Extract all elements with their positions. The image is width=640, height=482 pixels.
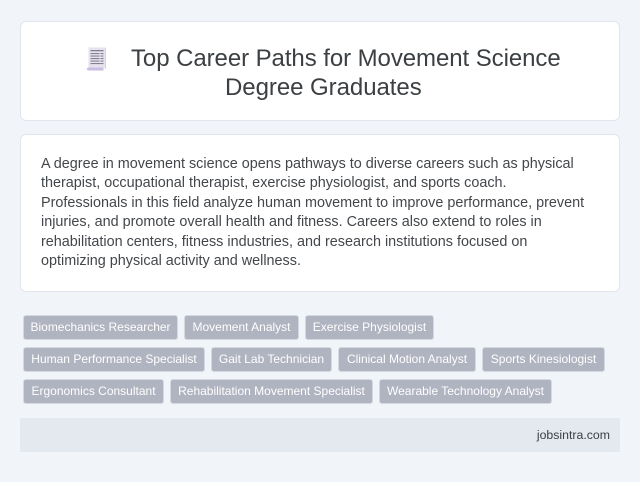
description text xyxy=(41,156,584,269)
tag: Movement Analyst xyxy=(192,320,291,334)
description panel xyxy=(20,134,620,292)
tag xyxy=(23,347,205,372)
footer text: jobsintra.com xyxy=(537,428,610,442)
tag xyxy=(379,379,552,404)
tag xyxy=(338,347,476,372)
description text: Professionals in this field analyze human movement to improve performance, prevent xyxy=(41,195,584,211)
description text: rehabilitation centers, fitness industries, and research institutions focused on xyxy=(41,234,527,250)
icon: document scroll xyxy=(86,48,106,70)
tag: Exercise Physiologist xyxy=(313,320,426,334)
tag xyxy=(211,347,332,372)
description text: injuries, and promote overall health and fitness. Careers also extend to roles in xyxy=(41,214,542,230)
tag: Wearable Technology Analyst xyxy=(387,384,544,398)
title text xyxy=(131,45,561,101)
tag: Gait Lab Technician xyxy=(219,352,324,366)
tag xyxy=(305,315,434,340)
tag xyxy=(23,315,178,340)
description text: optimizing physical activity and wellness. xyxy=(41,253,301,269)
tag: Ergonomics Consultant xyxy=(31,384,156,398)
tag: Human Performance Specialist xyxy=(31,352,197,366)
title panel: Degree Graduates xyxy=(225,74,422,101)
tag: Biomechanics Researcher xyxy=(30,320,171,334)
tags xyxy=(23,315,605,404)
tag xyxy=(184,315,299,340)
tag: Sports Kinesiologist xyxy=(491,352,596,366)
tag: Rehabilitation Movement Specialist xyxy=(178,384,365,398)
description text: therapist, occupational therapist, exercise physiologist, and sports coach. xyxy=(41,175,507,191)
description text: A degree in movement science opens pathways to diverse careers such as physical xyxy=(41,156,574,172)
footer bar xyxy=(20,418,620,452)
tag xyxy=(23,379,164,404)
tag: Clinical Motion Analyst xyxy=(347,352,467,366)
tag xyxy=(482,347,605,372)
tag xyxy=(170,379,373,404)
title panel: Top Career Paths for Movement Science xyxy=(131,45,561,72)
title panel xyxy=(20,21,620,121)
